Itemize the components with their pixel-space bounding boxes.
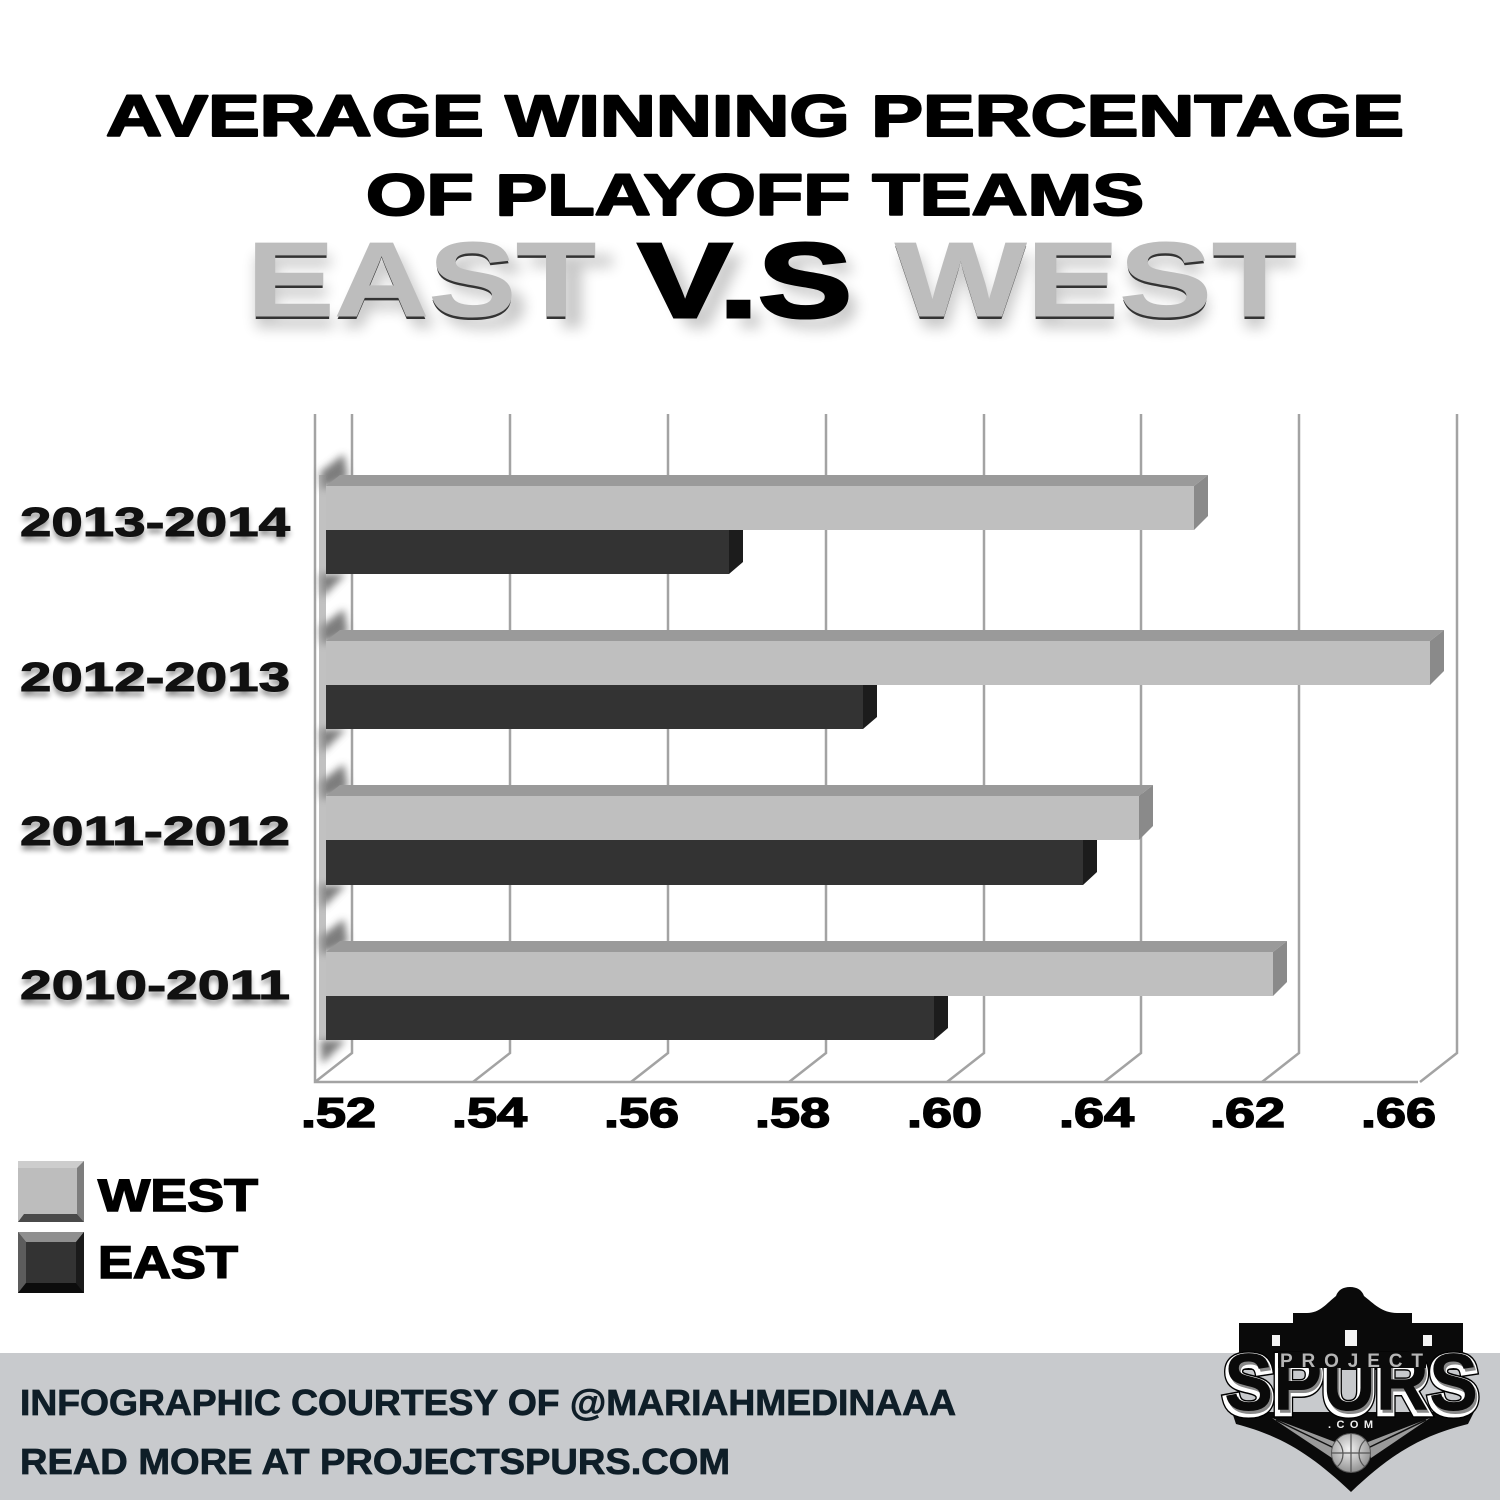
year labels <box>20 499 290 1013</box>
heading: East v.s West: V.S <box>638 222 852 340</box>
bar shadows on left wall <box>320 454 348 1064</box>
year labels: 2013-2014 <box>20 499 290 545</box>
x axis labels: .66 <box>1361 1089 1436 1136</box>
bars: 2012-2013 <box>326 630 1444 729</box>
chart: grid lines and axes <box>315 414 1457 1082</box>
legend: west label: WEST <box>98 1170 258 1221</box>
heading: East v.s West: EAST <box>247 224 596 342</box>
logo: basketball <box>1332 1434 1370 1472</box>
title: OF PLAYOFF TEAMS <box>366 163 1144 228</box>
x axis labels <box>301 1089 1436 1136</box>
year labels: 2010-2011 <box>20 967 290 1013</box>
logo: shield base <box>1232 1412 1474 1492</box>
year labels: 2012-2013 <box>20 659 290 705</box>
legend: east label: EAST <box>98 1237 238 1288</box>
x axis labels: .52 <box>301 1089 376 1136</box>
footer band <box>0 1353 1500 1500</box>
legend: east swatch <box>18 1232 84 1293</box>
footer credits <box>20 1382 956 1482</box>
bars: 2011-2012 <box>326 785 1153 885</box>
year labels: 2013-2014 <box>20 504 290 550</box>
logo: alamo silhouette <box>1239 1287 1463 1370</box>
title: AVERAGE WINNING PERCENTAGE <box>106 84 1404 149</box>
footer credits: READ MORE AT PROJECTSPURS.COM <box>20 1441 730 1482</box>
x axis labels: .58 <box>755 1089 830 1136</box>
heading: East v.s West: WEST <box>895 221 1297 339</box>
x axis labels: .62 <box>1210 1089 1285 1136</box>
legend <box>18 1161 258 1293</box>
logo: SPURS wordmark: SPURS <box>1224 1340 1478 1431</box>
logo: .COM: .COM <box>1328 1419 1373 1431</box>
footer credits: INFOGRAPHIC COURTESY OF @MARIAHMEDINAAA <box>20 1382 956 1423</box>
heading: East v.s West <box>247 221 1297 351</box>
legend: west swatch <box>18 1161 84 1222</box>
year labels: 2012-2013 <box>20 654 290 700</box>
x axis labels: .54 <box>452 1089 528 1136</box>
x axis labels: .56 <box>604 1089 679 1136</box>
x axis labels: .64 <box>1059 1089 1135 1136</box>
logo: alamo windows <box>1272 1330 1432 1346</box>
heading: East v.s West: WEST <box>895 224 1297 342</box>
year labels: 2011-2012 <box>20 808 290 854</box>
year labels: 2010-2011 <box>20 962 290 1008</box>
heading: East v.s West: EAST <box>247 221 596 339</box>
logo: wings <box>1272 1418 1430 1458</box>
year labels: 2011-2012 <box>20 813 290 859</box>
logo: SPURS wordmark: SPURS <box>1224 1337 1478 1428</box>
title <box>106 84 1404 228</box>
logo: Project Spurs <box>1224 1287 1480 1492</box>
heading: East v.s West: EAST V.S WEST <box>247 233 1297 351</box>
logo: PROJECT: PROJECT <box>1280 1351 1423 1372</box>
bars: 2013-2014 <box>326 475 1208 574</box>
bars: 2010-2011 <box>326 941 1287 1040</box>
x axis labels: .60 <box>907 1089 982 1136</box>
logo: SPURS wordmark: SPURS <box>1224 1340 1478 1431</box>
